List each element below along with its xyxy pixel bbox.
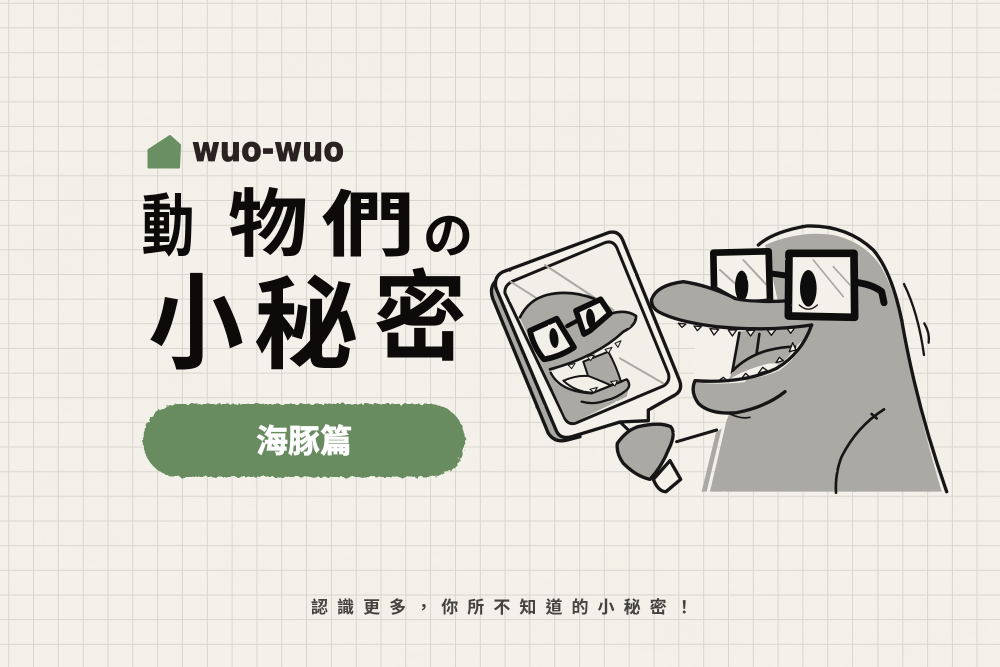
title <box>141 165 473 390</box>
handle end cap <box>653 461 681 492</box>
logo <box>148 130 344 170</box>
motion lines <box>904 284 929 355</box>
title: 小 <box>148 239 244 390</box>
reflected teeth <box>568 341 621 393</box>
lower jaw <box>693 330 813 414</box>
flipper <box>836 409 884 493</box>
right lens <box>788 253 855 317</box>
right eye <box>800 270 817 307</box>
category pill <box>143 404 465 477</box>
reflected glasses <box>530 299 610 359</box>
dolphin <box>652 226 947 493</box>
handle grip <box>617 424 673 479</box>
bridge <box>770 273 789 276</box>
pill label: 海豚篇 <box>256 416 352 462</box>
throat panel <box>733 325 812 371</box>
reflected head and body <box>520 293 628 422</box>
mouth interior <box>693 320 812 382</box>
illustration: dolphin with mirror <box>491 226 947 493</box>
arm line <box>677 430 717 442</box>
glasses <box>713 251 884 317</box>
temple arm <box>858 283 884 303</box>
footer tagline: 認識更多，你所不知道的小秘密！ <box>311 593 702 618</box>
left glare <box>720 260 767 285</box>
body fill <box>710 234 942 492</box>
teeth <box>678 323 796 381</box>
icon: green house <box>148 136 180 168</box>
upper beak <box>652 282 812 329</box>
reflected tongue <box>563 376 615 393</box>
title: の <box>423 196 473 268</box>
mirror glass <box>505 242 669 424</box>
mirror frame <box>495 232 681 437</box>
reflected jaw <box>551 373 629 403</box>
logo wordmark: wuo-wuo <box>192 130 344 170</box>
mirror back edge <box>491 282 580 441</box>
left eye <box>735 271 748 301</box>
reflected beak <box>552 312 636 368</box>
left lens <box>714 251 769 300</box>
title: 動 <box>141 171 195 270</box>
title: 密 <box>373 238 467 381</box>
mirror handle <box>617 422 717 492</box>
hand mirror <box>491 232 681 441</box>
tongue <box>728 347 795 381</box>
title: 們 <box>321 167 415 272</box>
glass glare <box>511 265 663 383</box>
body outline <box>758 226 947 492</box>
reflected throat <box>583 352 622 387</box>
title: 物 <box>228 165 308 272</box>
right glare <box>813 260 850 297</box>
reflected dolphin <box>520 293 636 422</box>
title: 秘 <box>253 244 359 389</box>
